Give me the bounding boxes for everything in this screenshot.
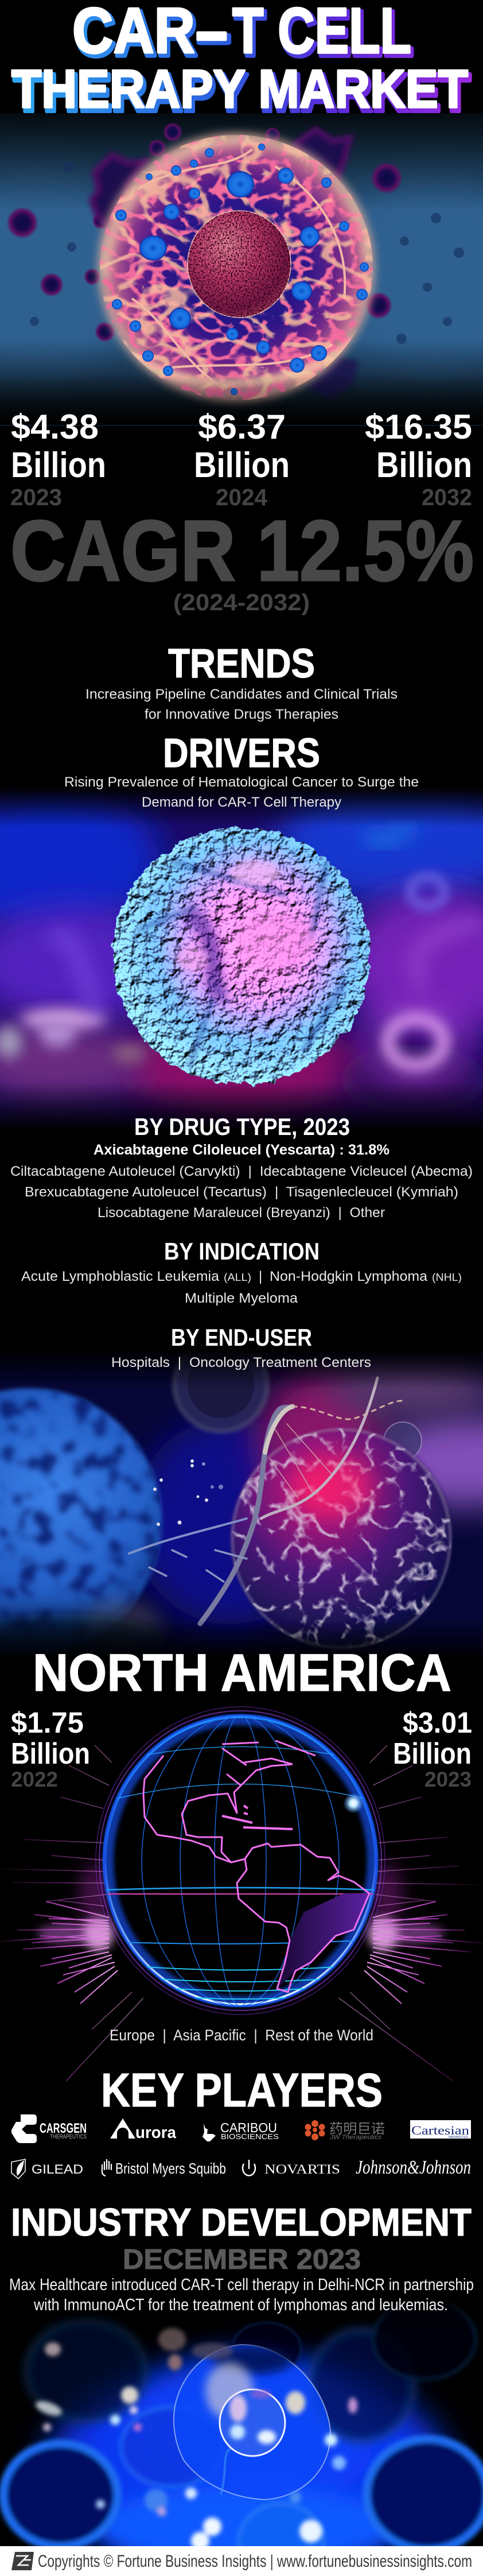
north america heading: NORTH AMERICA <box>33 1644 451 1702</box>
top small sphere <box>174 1338 422 1460</box>
market value 2032: Billion <box>376 446 472 485</box>
drivers: Rising Prevalence of Hematological Cancer to Surge the <box>64 774 419 790</box>
background cells <box>3 2299 483 2576</box>
floating particles <box>153 1459 223 1526</box>
logo: cartesian: Cartesian <box>411 2123 469 2137</box>
background spots <box>6 122 464 399</box>
market value 2032: 2032 <box>422 484 472 510</box>
market value 2024: 2024 <box>216 484 267 510</box>
footer <box>0 2546 483 2576</box>
grid lines <box>98 1715 384 2006</box>
north america value 2023: $3.01 <box>403 1706 472 1739</box>
logo: gilead <box>11 2159 83 2179</box>
icon: fortune business insights logo <box>11 2552 34 2570</box>
background virus ring upper right <box>410 877 445 907</box>
logo: caribou biosciences: BIOSCIENCES <box>221 2132 279 2141</box>
by end-user: BY END-USER <box>171 1324 312 1351</box>
DNA strands <box>129 1378 402 1624</box>
by indication: Multiple Myeloma <box>185 1291 298 1306</box>
virus particle <box>113 827 370 1084</box>
north america value 2022: $1.75 <box>11 1706 84 1739</box>
blurred blue sphere <box>0 1384 166 1671</box>
north america value 2022: Billion <box>11 1737 90 1771</box>
logo: aurora <box>110 2118 177 2142</box>
title <box>11 0 470 123</box>
market value 2023: Billion <box>11 446 106 485</box>
by drug type: Axicabtagene Ciloleucel (Yescarta) : 31.8% <box>94 1142 389 1158</box>
north america value 2023: 2023 <box>424 1768 472 1791</box>
logo: carsgen: CARSGEN <box>40 2121 87 2136</box>
logo: novartis <box>243 2160 340 2176</box>
tumor sphere <box>229 1427 453 1651</box>
bright spots <box>34 2328 357 2550</box>
logo: aurora: urora <box>135 2124 177 2142</box>
drivers <box>64 731 419 810</box>
light rays <box>0 1745 483 2081</box>
by end-user: Hospitals | Oncology Treatment Centers <box>111 1355 371 1370</box>
trends: Increasing Pipeline Candidates and Clinical Trials <box>85 687 398 702</box>
bright glint <box>343 1793 364 1814</box>
logo: caribou biosciences: CARIBOU <box>220 2120 277 2135</box>
other regions: Europe | Asia Pacific | Rest of the World <box>110 2027 373 2044</box>
by indication: | <box>259 1269 262 1284</box>
drivers: Demand for CAR-T Cell Therapy <box>142 795 341 810</box>
logo: gilead: GILEAD <box>32 2162 83 2176</box>
by indication <box>21 1238 462 1306</box>
logo: cartesian <box>410 2120 471 2139</box>
north america value 2023 <box>393 1706 472 1791</box>
by drug type: Lisocabtagene Maraleucel (Breyanzi) | Other <box>98 1205 385 1221</box>
logo: novartis: NOVARTIS <box>264 2162 340 2176</box>
logo: carsgen <box>11 2114 87 2143</box>
organelles <box>112 144 369 395</box>
trends <box>85 641 398 722</box>
globe <box>0 1707 483 2081</box>
market value 2024: $6.37 <box>198 408 286 446</box>
background virus ring lower right <box>365 919 483 1082</box>
north america value 2022 <box>11 1706 90 1791</box>
trends: for Innovative Drugs Therapies <box>145 707 338 722</box>
by drug type: Brexucabtagene Autoleucel (Tecartus) | Tisagenlecleucel (Kymriah) <box>25 1184 458 1200</box>
background blob lower left <box>0 936 146 1063</box>
market value 2032 <box>365 408 472 510</box>
logo: cartesian: THERAPEUTICS <box>448 2136 469 2139</box>
by indication: BY INDICATION <box>164 1238 320 1265</box>
cell membrane network <box>98 132 379 402</box>
virus image <box>0 787 483 1137</box>
market value 2023: $4.38 <box>11 408 99 446</box>
by drug type: BY DRUG TYPE, 2023 <box>134 1113 350 1140</box>
logo: caribou biosciences <box>202 2120 279 2141</box>
logo: carsgen: THERAPEUTICS <box>50 2133 87 2140</box>
nucleus <box>186 210 293 319</box>
ray glow <box>37 1863 445 1951</box>
by indication: (NHL) <box>432 1272 462 1283</box>
north america value 2022: 2022 <box>11 1768 58 1791</box>
by end-user <box>111 1324 371 1370</box>
central cell <box>174 2345 330 2500</box>
stem cell image <box>0 2296 483 2576</box>
cell body <box>98 132 379 402</box>
by drug type <box>10 1113 473 1221</box>
continents: americas <box>143 1741 369 1992</box>
by indication: Acute Lymphoblastic Leukemia <box>21 1269 220 1284</box>
date: DECEMBER 2023 <box>123 2244 361 2275</box>
market value 2023: 2023 <box>10 484 62 510</box>
market value 2024: Billion <box>194 446 290 485</box>
globe rim <box>96 1707 385 2015</box>
cancer cell image <box>0 1338 483 1671</box>
industry development text <box>9 2276 474 2314</box>
logo: jw therapeutics: JW Therapeutics <box>329 2134 382 2141</box>
by indication: Non-Hodgkin Lymphoma <box>270 1269 428 1284</box>
market value 2024 <box>194 408 290 510</box>
logo: bristol myers squibb: Bristol Myers Squibb <box>115 2160 226 2177</box>
by indication: (ALL) <box>224 1272 251 1283</box>
trends: TRENDS <box>168 641 315 687</box>
CAGR: (2024-2032) <box>173 589 310 615</box>
key players heading: KEY PLAYERS <box>101 2063 383 2117</box>
drivers: DRIVERS <box>163 731 320 776</box>
logo: jw therapeutics: 药明巨诺 <box>329 2121 385 2137</box>
logo: jw therapeutics <box>305 2120 385 2141</box>
north america value 2023: Billion <box>393 1737 472 1771</box>
market value 2032: $16.35 <box>365 408 472 446</box>
hero image: cell with nucleus <box>0 113 483 426</box>
market value 2023 <box>10 408 106 510</box>
by drug type: Ciltacabtagene Autoleucel (Carvykti) | Idecabtagene Vicleucel (Abecma) <box>10 1164 473 1179</box>
